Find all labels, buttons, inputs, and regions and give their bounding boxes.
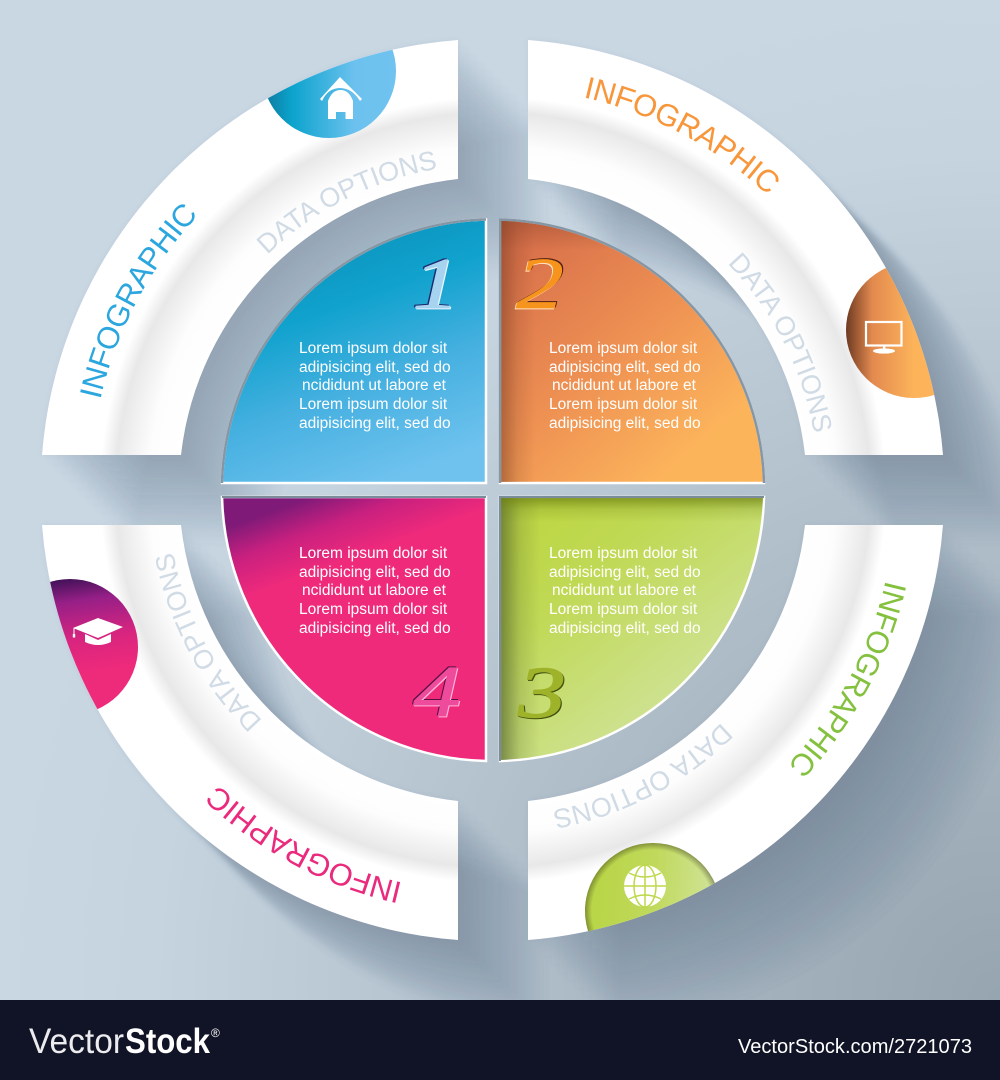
heading: infographic magenta: INFOGRAPHIC xyxy=(207,788,400,903)
orange quarter shape xyxy=(500,220,764,483)
text block 4: ncididunt ut labore et xyxy=(302,582,447,599)
number 4: 4 xyxy=(412,651,460,732)
footer bar xyxy=(0,1000,1000,1080)
text block 4: adipisicing elit, sed do xyxy=(299,564,451,581)
heading: infographic orange: INFOGRAPHIC xyxy=(586,77,779,192)
edge shade xyxy=(500,220,764,483)
text block 4: Lorem ipsum dolor sit xyxy=(299,601,448,618)
text block 4 xyxy=(299,545,451,637)
text block 2 xyxy=(549,340,701,432)
number 3: 3 xyxy=(518,654,567,734)
label: data options: DATA OPTIONS xyxy=(729,252,832,432)
text block 2: Lorem ipsum dolor sit xyxy=(549,340,698,357)
panel: quarter 2 orange xyxy=(500,220,764,483)
blue quarter shape xyxy=(222,220,486,483)
text block 2: Lorem ipsum dolor sit xyxy=(549,396,698,413)
text block 1 xyxy=(299,340,451,432)
text block 1: Lorem ipsum dolor sit xyxy=(299,340,448,357)
footer logo: Stock xyxy=(125,1022,210,1061)
panel: quarter 4 magenta xyxy=(222,497,486,761)
number 1: 1 xyxy=(413,245,461,326)
text block 1: ncididunt ut labore et xyxy=(302,377,447,394)
number 4: 4 xyxy=(413,652,461,732)
label: data options: DATA OPTIONS xyxy=(256,152,436,254)
footer id: VectorStock.com/2721073 xyxy=(738,1036,972,1058)
edge shade xyxy=(500,497,764,761)
text block 3: Lorem ipsum dolor sit xyxy=(549,545,698,562)
green quarter shape xyxy=(500,497,764,761)
panel: top-right ring segment xyxy=(528,40,943,455)
ring shape xyxy=(528,525,943,940)
footer logo: Vector xyxy=(29,1022,124,1061)
text block 1: Lorem ipsum dolor sit xyxy=(299,396,448,413)
top inner shading xyxy=(501,498,763,760)
text block 3: ncididunt ut labore et xyxy=(552,582,697,599)
left inner shading xyxy=(501,498,763,760)
number 2: 2 xyxy=(516,244,564,324)
number 3: 3 xyxy=(517,653,566,733)
ring shape xyxy=(528,40,943,455)
number 1: 1 xyxy=(412,244,460,324)
panel: top-left ring segment xyxy=(42,40,458,455)
blue tab with house icon xyxy=(268,50,396,138)
number 4: 4 xyxy=(414,653,462,733)
text block 3 xyxy=(549,545,701,637)
label: data options: DATA OPTIONS xyxy=(554,724,732,828)
text block 4: adipisicing elit, sed do xyxy=(299,620,451,637)
text block 1: adipisicing elit, sed do xyxy=(299,359,451,376)
magenta quarter shape xyxy=(222,497,486,761)
text block 1: adipisicing elit, sed do xyxy=(299,415,451,432)
text block 2: adipisicing elit, sed do xyxy=(549,359,701,376)
inner shading xyxy=(501,220,763,482)
panel: bottom-right ring segment xyxy=(528,525,943,940)
text block 3: adipisicing elit, sed do xyxy=(549,564,701,581)
panel: quarter 3 green xyxy=(500,497,764,761)
heading: infographic blue: INFOGRAPHIC xyxy=(80,204,195,398)
number 2: 2 xyxy=(515,245,563,325)
ring shape xyxy=(42,40,458,455)
panel: bottom-left ring segment xyxy=(42,525,458,940)
top edge shade xyxy=(222,496,486,498)
top inner shading xyxy=(501,220,763,482)
text block 2: ncididunt ut labore et xyxy=(552,377,697,394)
ring shape xyxy=(42,525,458,940)
top edge shade xyxy=(222,220,486,483)
text block 3: adipisicing elit, sed do xyxy=(549,620,701,637)
magenta tab with graduation cap icon xyxy=(50,579,138,710)
text block 2: adipisicing elit, sed do xyxy=(549,415,701,432)
number 2: 2 xyxy=(517,243,565,323)
label: data options: DATA OPTIONS xyxy=(156,554,261,732)
panel: quarter 1 blue xyxy=(222,220,486,483)
text block 4: Lorem ipsum dolor sit xyxy=(299,545,448,562)
heading: infographic green: INFOGRAPHIC xyxy=(791,582,906,776)
footer logo: ® xyxy=(211,1026,220,1040)
orange tab with monitor icon xyxy=(846,268,934,398)
number 1: 1 xyxy=(411,243,458,323)
green tab with globe icon xyxy=(585,843,715,932)
text block 3: Lorem ipsum dolor sit xyxy=(549,601,698,618)
footer logo xyxy=(29,1022,220,1061)
